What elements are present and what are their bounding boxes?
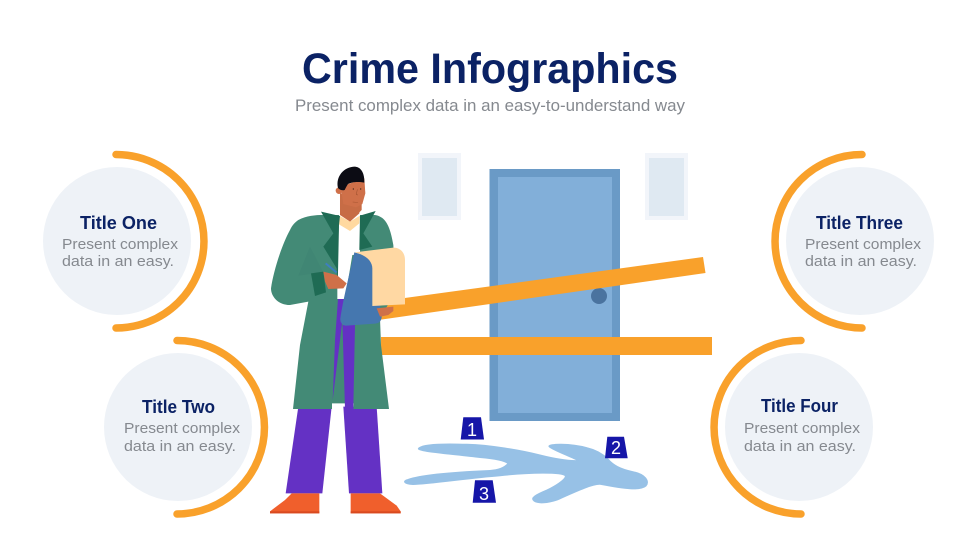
right lapel xyxy=(359,211,376,250)
subtitle: Present complex data in an easy-to-understand way xyxy=(295,96,685,115)
coat and torso xyxy=(271,202,396,409)
panel: title two: Present complex xyxy=(124,420,241,437)
arm fold xyxy=(298,247,323,276)
panel: title two: data in an easy. xyxy=(124,438,236,455)
neck xyxy=(340,202,360,222)
icon: horizontal caution tape xyxy=(381,337,712,355)
icon: evidence marker 3: 3 xyxy=(479,484,489,504)
pen xyxy=(326,263,337,273)
icon: diagonal caution tape xyxy=(376,257,706,320)
left lapel xyxy=(321,212,340,288)
panel: title one: Title One xyxy=(80,213,157,233)
icon: evidence marker 2 xyxy=(605,437,628,458)
legs and shoes xyxy=(270,407,401,513)
panel: title three: data in an easy. xyxy=(805,253,917,270)
hand xyxy=(323,272,347,289)
panel: title one xyxy=(43,154,204,328)
panel: title four: Title Four xyxy=(761,396,838,416)
title: Crime Infographics xyxy=(302,45,678,93)
icon: evidence marker 3 xyxy=(473,480,496,504)
panel: title four xyxy=(714,340,873,514)
panel: title three xyxy=(775,154,934,328)
icon: right window xyxy=(645,153,688,220)
panel: title four: Present complex xyxy=(744,420,861,437)
icon: evidence marker 2: 2 xyxy=(611,438,621,458)
panel: title three: Present complex xyxy=(805,236,922,253)
icon: door xyxy=(490,169,620,421)
panel: title two: Title Two xyxy=(142,397,215,417)
head xyxy=(336,167,365,222)
icon: evidence marker 1 xyxy=(461,417,484,440)
collar xyxy=(339,216,360,231)
panel: title two xyxy=(104,340,264,514)
investigator figure xyxy=(270,167,405,513)
icon: evidence marker 1: 1 xyxy=(467,420,477,440)
clipboard and paper xyxy=(340,248,405,326)
inner trousers xyxy=(333,299,345,400)
cuff xyxy=(311,272,326,296)
panel: title four: data in an easy. xyxy=(744,438,856,455)
icon: left window xyxy=(418,153,461,220)
panel: title three: Title Three xyxy=(816,213,903,233)
panel: title one: data in an easy. xyxy=(62,253,174,270)
icon: body outline puddle xyxy=(405,444,647,503)
panel: title one: Present complex xyxy=(62,236,179,253)
shirt xyxy=(337,215,360,299)
